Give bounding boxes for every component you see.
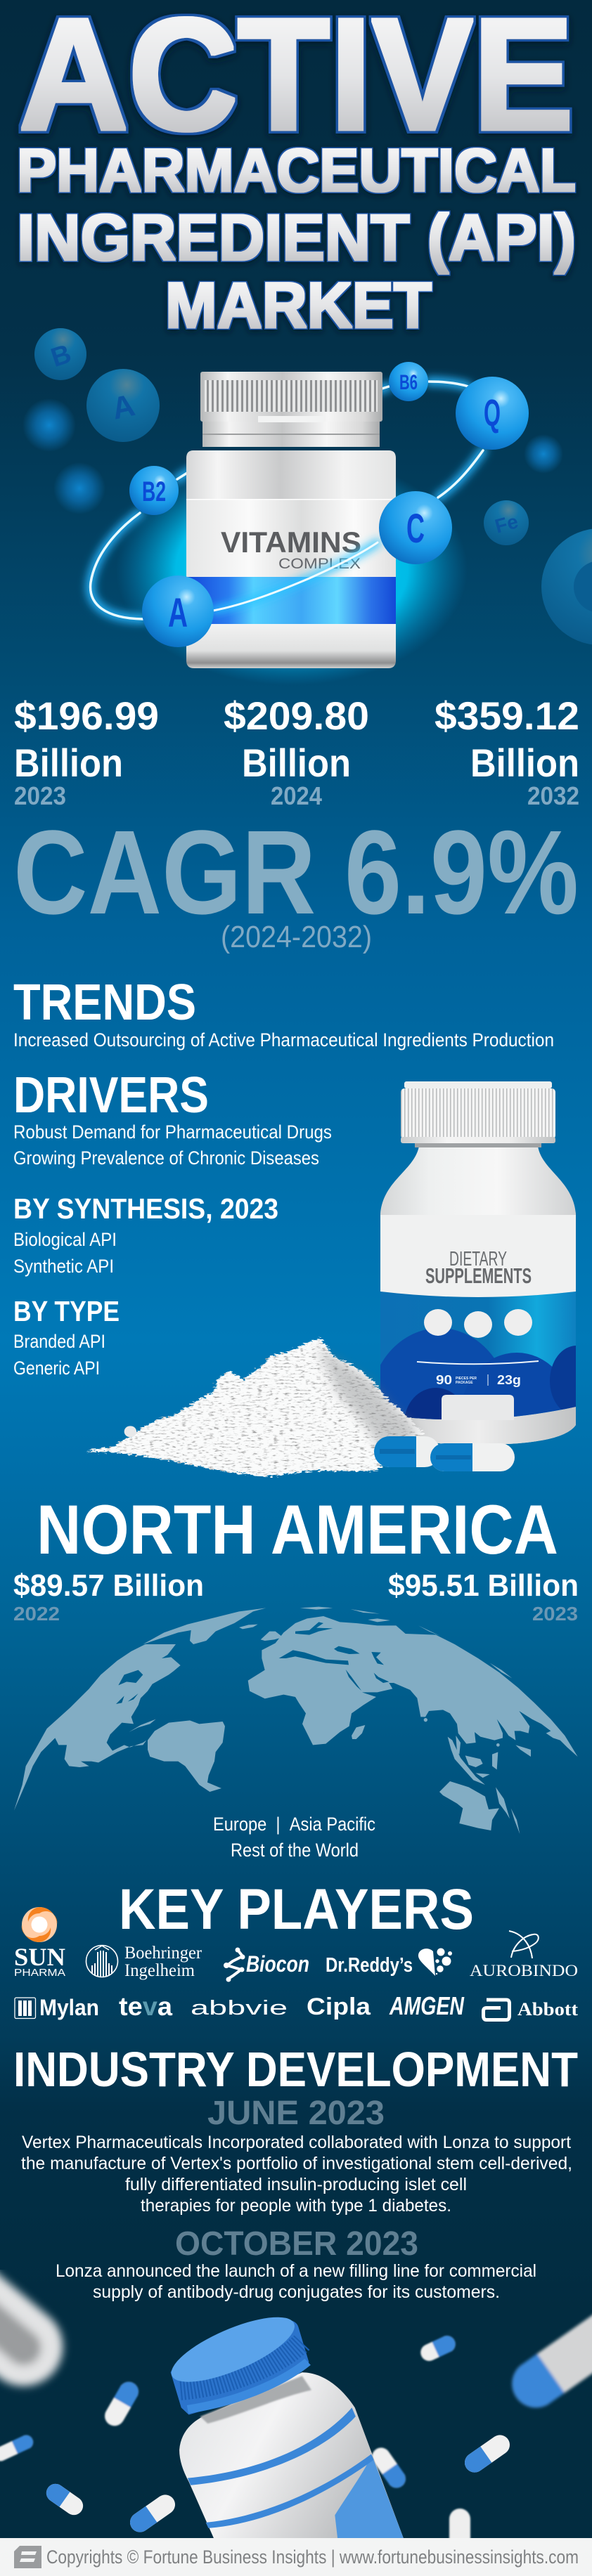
section: drivers <box>13 1067 332 1169</box>
logo: Biocon <box>224 1948 309 1982</box>
sphere B6 <box>389 362 428 401</box>
sphere B2: B2 <box>142 476 166 507</box>
dark sphere A: A <box>109 388 138 427</box>
regional stat: 2022: $89.57 Billion <box>13 1568 204 1603</box>
sphere Q <box>456 377 529 450</box>
regional stat: 2022: 2022 <box>13 1603 60 1625</box>
dark sphere cut off at right <box>541 528 592 645</box>
CAGR period: (2024-2032) <box>221 920 372 954</box>
world map <box>14 1607 578 1834</box>
development: June 2023: the manufacture of Vertex's portfolio of investigational stem cell-derived, <box>21 2154 572 2173</box>
small capsule 6 <box>465 2435 510 2473</box>
stat: 2024 market size: $209.80 <box>224 694 369 738</box>
label text: SUPPLEMENTS: SUPPLEMENTS <box>425 1263 532 1288</box>
development: October 2023 <box>56 2225 536 2302</box>
stat: 2032 market size <box>435 694 579 810</box>
label pills <box>424 1309 532 1338</box>
dark sphere B: B <box>47 339 75 373</box>
bottle cap <box>401 1081 555 1147</box>
logo: Biocon: Biocon <box>246 1951 309 1977</box>
dietary supplements bottle <box>380 1081 576 1445</box>
development: June 2023: Vertex Pharmaceuticals Incorporated collaborated with Lonza to support <box>22 2133 571 2152</box>
sphere B2 <box>129 466 179 515</box>
bottom scene: falling capsules and bottle <box>0 2270 592 2538</box>
regional stat: 2022 <box>13 1568 204 1625</box>
sphere A <box>142 575 214 647</box>
stat: 2023 market size: Billion <box>14 741 123 785</box>
stat: 2032 market size: 2032 <box>527 781 579 810</box>
key players heading: KEY PLAYERS <box>119 1878 474 1941</box>
lower stripe <box>206 2454 374 2528</box>
hero: vitamins bottle with orbiting spheres <box>22 328 592 685</box>
section: by synthesis <box>13 1192 278 1277</box>
lower label <box>335 2455 405 2542</box>
stat: 2024 market size <box>224 694 369 810</box>
logo: Cipla: Cipla <box>307 1993 371 2020</box>
americas and atlantic <box>14 1608 283 1811</box>
other regions: Rest of the World <box>231 1840 359 1861</box>
logo: Aurobindo: AUROBINDO <box>470 1962 578 1979</box>
other regions <box>213 1814 375 1861</box>
development: June 2023: JUNE 2023 <box>207 2095 385 2132</box>
stat: 2023 market size: $196.99 <box>14 694 159 738</box>
bottle body <box>186 450 396 668</box>
section: by type <box>13 1295 120 1379</box>
capsules <box>374 1436 515 1471</box>
blurred capsules <box>0 2270 592 2538</box>
logo: Mylan: Mylan <box>39 1995 99 2020</box>
footer bar <box>0 2538 592 2576</box>
section: by type: Generic API <box>13 1358 100 1379</box>
bottle neck <box>200 2376 311 2424</box>
section: by type: Branded API <box>13 1331 105 1352</box>
tilted bottle <box>170 2317 404 2538</box>
section: by synthesis: Biological API <box>13 1229 117 1250</box>
section: by synthesis: BY SYNTHESIS, 2023 <box>13 1192 278 1225</box>
label data: 90 pieces, 23g: PACKAGE <box>456 1381 473 1385</box>
logo: Sun Pharma: SUN <box>14 1943 65 1971</box>
title <box>17 0 576 341</box>
sphere A: A <box>168 590 188 636</box>
dark sphere Fe: Fe <box>493 510 520 538</box>
bottle lower rim <box>380 1405 576 1445</box>
development: October 2023: OCTOBER 2023 <box>175 2225 418 2263</box>
logo: Amgen: AMGEN <box>389 1991 465 2020</box>
orbit ring behind bottle <box>91 382 483 619</box>
powder shaded slope <box>317 1347 418 1455</box>
label data: 90 pieces, 23g: PIECES PER <box>456 1377 477 1381</box>
logo: Abbott <box>484 1999 578 2019</box>
small capsule 3 <box>0 2433 35 2464</box>
logo: Mylan <box>15 1995 99 2020</box>
stat: 2024 market size: Billion <box>242 741 351 785</box>
small capsule 4 <box>46 2483 83 2516</box>
capsule right <box>430 1443 515 1471</box>
logo: Aurobindo <box>470 1931 578 1979</box>
stat: 2032 market size: Billion <box>470 741 579 785</box>
stat: 2032 market size: $359.12 <box>435 694 579 738</box>
dark sphere A <box>86 369 160 442</box>
bottle label text: COMPLEX: COMPLEX <box>278 556 361 572</box>
small capsule 5 <box>130 2494 175 2532</box>
logo: Teva: teva <box>119 1992 172 2021</box>
development: October 2023: Lonza announced the launch of a new filling line for commercial <box>56 2261 536 2281</box>
orbit ring in front of bottle <box>213 542 378 611</box>
stray powder ball <box>124 1426 136 1437</box>
logo: Boehringer Ingelheim: Ingelheim <box>124 1961 195 1980</box>
powder pile <box>84 1339 424 1477</box>
logo: Abbott: Abbott <box>517 1999 578 2019</box>
section: drivers: Growing Prevalence of Chronic Diseases <box>13 1147 319 1169</box>
logo: Sun Pharma <box>14 1907 65 1979</box>
label data: 90 pieces, 23g <box>436 1373 521 1387</box>
bottle cap <box>163 2305 309 2414</box>
title line: MARKET: MARKET <box>165 270 432 341</box>
title line: INGREDIENT (API): INGREDIENT (API) <box>17 201 576 274</box>
development: June 2023: therapies for people with type 1 diabetes. <box>141 2196 451 2216</box>
bottle body <box>179 2372 405 2542</box>
powder mound <box>84 1339 424 1477</box>
section: trends <box>13 975 554 1050</box>
section: drivers: Robust Demand for Pharmaceutical Drugs <box>13 1121 332 1143</box>
sphere Q: Q <box>484 392 501 434</box>
stat: 2023 market size: 2023 <box>14 781 66 810</box>
upper stripe <box>188 2407 356 2485</box>
bottle label text: VITAMINS: VITAMINS <box>221 526 361 559</box>
section: by type: BY TYPE <box>13 1295 120 1327</box>
label data: 90 pieces, 23g: 90 <box>436 1373 452 1387</box>
footer logo <box>14 2546 41 2568</box>
large capsule right <box>510 2312 592 2410</box>
development: June 2023: fully differentiated insulin-producing islet cell <box>125 2175 467 2194</box>
small capsule 2 <box>103 2381 139 2427</box>
dark sphere Fe <box>484 500 529 545</box>
label rule <box>417 1361 539 1364</box>
logo: Dr. Reddy's: Dr.Reddy’s <box>326 1954 413 1977</box>
section: by synthesis: Synthetic API <box>13 1256 114 1277</box>
label white tab <box>442 1395 514 1420</box>
logo: AbbVie: abbvie <box>191 1997 288 2019</box>
logo: Sun Pharma: PHARMA <box>14 1967 65 1979</box>
label text: DIETARY: DIETARY <box>449 1248 507 1270</box>
development: June 2023 <box>21 2095 572 2216</box>
bottle shoulder and base <box>380 1146 576 1445</box>
sphere B6: B6 <box>399 371 418 394</box>
regional stat: 2023 <box>388 1568 579 1625</box>
blurred background spheres <box>22 398 563 514</box>
eurasia africa oceania <box>248 1607 578 1834</box>
stat: 2024 market size: 2024 <box>271 781 322 810</box>
logo: Boehringer Ingelheim: Boehringer <box>124 1944 202 1963</box>
small capsule 1 <box>419 2334 457 2362</box>
sphere C: C <box>406 506 425 552</box>
small capsule 7 <box>371 2447 406 2489</box>
label data: 90 pieces, 23g: 23g <box>497 1373 521 1387</box>
large grey capsule left <box>0 2270 70 2393</box>
blue label panel <box>380 1292 576 1419</box>
small capsule 8 <box>448 2507 472 2538</box>
regional stat: 2023: 2023 <box>532 1603 578 1625</box>
section: trends: TRENDS <box>13 975 196 1031</box>
sphere C <box>379 491 452 564</box>
title line: PHARMACEUTICAL: PHARMACEUTICAL <box>17 137 576 204</box>
cyan glow behind bottle <box>116 453 468 685</box>
other regions: Europe | Asia Pacific <box>213 1814 375 1835</box>
dark sphere B <box>34 328 86 380</box>
capsule left <box>374 1436 440 1467</box>
logo: Boehringer Ingelheim <box>86 1944 202 1980</box>
regional stat: 2023: $95.51 Billion <box>388 1568 579 1603</box>
development: October 2023: supply of antibody-drug conjugates for its customers. <box>93 2282 500 2302</box>
section: drivers: DRIVERS <box>13 1067 209 1124</box>
white label area <box>380 1215 576 1297</box>
stat: 2023 market size <box>14 694 159 810</box>
bottle cap <box>200 372 382 447</box>
logo: Dr. Reddy's <box>326 1948 452 1977</box>
